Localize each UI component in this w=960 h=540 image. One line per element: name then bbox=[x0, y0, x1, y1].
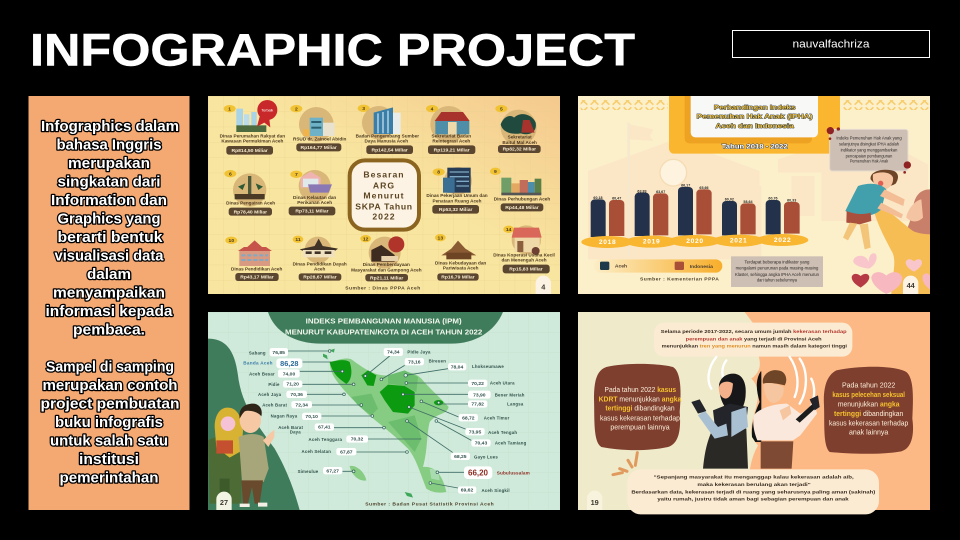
left callout: Pada tahun 2022 kasus bbox=[604, 387, 676, 394]
bottom quote: yaitu rumah, justru tidak aman bagi sebagian perempuan dan anak bbox=[657, 497, 849, 503]
left labels: Simeulue bbox=[298, 469, 319, 474]
right labels: 73,95 bbox=[469, 429, 481, 435]
item 6: Rp78,40 Miliar bbox=[234, 209, 267, 215]
info box: Pemenuhan Hak Anak bbox=[850, 159, 889, 164]
item 12: Dinas Pemberdayaan bbox=[363, 262, 410, 267]
page number: 27 bbox=[220, 498, 228, 507]
left labels: 67,27 bbox=[326, 469, 339, 475]
top decorative motif bbox=[581, 100, 929, 110]
panel: description text: project pembuatan bbox=[40, 396, 180, 412]
right labels: Pidie Jaya bbox=[407, 350, 431, 355]
left callout: kasus kekerasan terhadap bbox=[600, 415, 680, 422]
right labels: Langsa bbox=[507, 402, 524, 407]
right labels: 70,22 bbox=[471, 381, 484, 387]
bar chart: 60,76 bbox=[768, 197, 778, 201]
panel: description text: Sampel di samping bbox=[46, 358, 174, 376]
panel: description text: visualisasi data bbox=[54, 248, 164, 264]
decorative strokes bbox=[613, 453, 637, 475]
title banner bbox=[669, 96, 840, 154]
right labels: Lhokseumawe bbox=[472, 364, 504, 369]
item 4: Rp119,21 Miliar bbox=[434, 147, 470, 153]
right labels: Gayo Lues bbox=[474, 454, 498, 459]
item 8 bbox=[426, 167, 488, 214]
illustration: two people bbox=[691, 357, 820, 469]
item 11: 11 bbox=[295, 237, 301, 243]
page number bbox=[216, 492, 232, 510]
item 2: RSUD dr. Zainoel Abidin bbox=[293, 137, 347, 142]
item 2: Rp164,77 Miliar bbox=[301, 145, 337, 151]
title banner bbox=[268, 312, 503, 344]
item 1 bbox=[220, 100, 285, 155]
item 7: Dinas Kelautan dan bbox=[293, 195, 336, 200]
left labels: 86,28 bbox=[280, 359, 299, 368]
item 8: Rp53,32 Miliar bbox=[439, 207, 472, 213]
item 11 bbox=[293, 236, 347, 281]
panel: description text: Information dan bbox=[51, 192, 167, 209]
item 11: Aceh bbox=[314, 267, 326, 272]
item 13: 13 bbox=[438, 235, 443, 241]
bar chart: 60,33 bbox=[787, 199, 796, 203]
panel: ARG by SKPA bbox=[208, 96, 560, 294]
left labels: 72,34 bbox=[295, 402, 308, 408]
left labels: 76,85 bbox=[272, 350, 285, 356]
center title: ARG bbox=[373, 181, 395, 191]
right callout bbox=[824, 367, 913, 454]
center title: Besaran bbox=[363, 170, 405, 180]
legend: Aceh bbox=[615, 263, 627, 269]
author name box bbox=[732, 30, 930, 58]
bar chart: 60,47 bbox=[612, 197, 621, 201]
panel: description text: singkatan dari bbox=[58, 174, 160, 190]
item 8: Penataan Ruang Aceh bbox=[432, 198, 482, 203]
item 14: Dinas Koperasi Usaha Kecil bbox=[493, 252, 555, 257]
left callout: perempuan lainnya bbox=[610, 424, 670, 431]
item 9: Rp44,48 Miliar bbox=[505, 205, 539, 211]
right labels: 70,43 bbox=[475, 441, 487, 447]
item 5: Sekretariat bbox=[508, 135, 532, 140]
right labels: Aceh Utara bbox=[490, 381, 515, 386]
title banner: Perbandingan Indeks bbox=[714, 105, 796, 112]
left labels: Aceh Barat bbox=[262, 403, 287, 408]
panel: description text: Graphics yang bbox=[58, 210, 160, 228]
item 1: Kawasan Permukiman Aceh bbox=[221, 138, 283, 143]
item 6: Dinas Pengairan Aceh bbox=[226, 201, 275, 206]
left labels: 71,20 bbox=[286, 382, 299, 388]
info box: pencapaian pembangunan bbox=[846, 153, 893, 158]
left labels: Aceh Barat bbox=[278, 425, 303, 430]
item 13: Pariwisata Aceh bbox=[443, 266, 479, 271]
panel: description text: bahasa Inggris bbox=[56, 136, 162, 154]
left callout bbox=[594, 364, 681, 450]
left labels: Daya bbox=[290, 430, 301, 435]
item 1: 1 bbox=[228, 106, 231, 112]
legend: Indonesia bbox=[690, 264, 713, 270]
title: INFOGRAPHIC PROJECT bbox=[30, 24, 635, 76]
item 7: 7 bbox=[295, 172, 298, 178]
left labels: 70,10 bbox=[305, 414, 318, 420]
item 4: Sekretariat Badan bbox=[432, 134, 471, 139]
panel: description text: buku infografis bbox=[55, 414, 163, 431]
item 7: Perikanan Aceh bbox=[297, 200, 332, 205]
item 8: 8 bbox=[437, 170, 440, 176]
item 5 bbox=[495, 105, 541, 153]
item 6 bbox=[224, 170, 275, 216]
left labels: Aceh Jaya bbox=[258, 392, 282, 397]
source: Sumber : Dinas PPPA Aceh bbox=[345, 286, 421, 292]
right labels: 77,82 bbox=[471, 402, 484, 408]
item 13: Dinas Kebudayaan dan bbox=[435, 260, 486, 265]
item 14: dan Menengah Aceh bbox=[501, 258, 547, 263]
item 13: Rp16,79 Miliar bbox=[441, 275, 475, 281]
page number bbox=[903, 276, 918, 294]
bar chart: 2020 bbox=[686, 238, 704, 245]
item 12: 12 bbox=[363, 236, 369, 242]
item 3: 3 bbox=[362, 106, 365, 112]
panel: description text: merupakan contoh bbox=[42, 377, 178, 394]
item 3 bbox=[356, 105, 419, 154]
item 5: Baitul Mal Aceh bbox=[502, 140, 537, 145]
item 6: 6 bbox=[229, 171, 232, 177]
item 5: 5 bbox=[500, 106, 503, 112]
item 12: Rp21,11 Miliar bbox=[370, 275, 403, 281]
item 9: 9 bbox=[494, 169, 497, 175]
info box: Indeks Pemenuhan Hak Anak yang bbox=[836, 136, 902, 141]
title banner: Aceh dan Indonesia bbox=[715, 123, 794, 130]
note box: dari tahun sebelumnya bbox=[757, 278, 798, 283]
map of Aceh bbox=[323, 349, 449, 498]
panel: description text: berarti bentuk bbox=[58, 229, 163, 246]
left labels: Aceh Besar bbox=[249, 371, 275, 376]
item 4: 4 bbox=[431, 106, 434, 112]
note box: Terdapat beberapa indikator yang bbox=[744, 260, 810, 265]
page number: 44 bbox=[907, 281, 916, 290]
bottom quote: Berdasarkan data, kekerasan terjadi di ruang yang seharusnya paling aman (sakinah) bbox=[631, 489, 876, 495]
map dots bbox=[328, 350, 440, 484]
item 3: Daya Manusia Aceh bbox=[365, 139, 408, 144]
left callout: tertinggi dibandingkan bbox=[605, 406, 675, 413]
center title bbox=[350, 160, 419, 230]
right labels: Bener Meriah bbox=[495, 393, 525, 398]
illustration: two students bbox=[208, 404, 274, 509]
info box bbox=[827, 127, 911, 174]
note box: mengalami penurunan pada masing-masing bbox=[736, 266, 819, 271]
left labels: 70,36 bbox=[290, 392, 303, 398]
panel: description text: pembaca. bbox=[73, 322, 145, 338]
author name box: nauvalfachriza bbox=[792, 38, 870, 50]
left labels: 67,87 bbox=[340, 449, 353, 455]
bar chart: 65,66 bbox=[699, 186, 709, 190]
left labels: Nagan Raya bbox=[271, 414, 298, 419]
right labels: 73,16 bbox=[408, 359, 421, 365]
right labels: Bireuen bbox=[429, 359, 446, 364]
left labels: 67,41 bbox=[318, 425, 331, 431]
left labels: Banda Aceh bbox=[243, 360, 273, 365]
bar chart bbox=[581, 184, 808, 248]
title banner: Tahun 2018 - 2022 bbox=[722, 143, 788, 150]
source: Sumber : Badan Pusat Statistik Provinsi Aceh bbox=[365, 501, 494, 507]
bar chart: 60,18 bbox=[593, 196, 603, 200]
right labels: Aceh Singkil bbox=[481, 488, 510, 493]
info box: selanjutnya disingkat IPHA adalah bbox=[839, 142, 900, 147]
item 12: Masyarakat dan Gampong Aceh bbox=[351, 267, 422, 272]
right callout: anak lainnya bbox=[849, 430, 888, 437]
bottom quote: "Sepanjang masyarakat itu menganggap kalau kekerasan adalah aib, bbox=[654, 474, 854, 480]
title banner: INDEKS PEMBANGUNAN MANUSIA (IPM) bbox=[306, 317, 462, 326]
item 10 bbox=[225, 237, 282, 281]
right labels: 69,62 bbox=[461, 488, 473, 494]
left labels: Sabang bbox=[249, 350, 266, 355]
bar chart: 63,67 bbox=[656, 190, 665, 194]
item 9: Dinas Perhubungan Aceh bbox=[494, 197, 550, 202]
item 2 bbox=[290, 105, 347, 151]
item 2: 2 bbox=[295, 106, 298, 112]
item 8: Dinas Pekerjaan Umum dan bbox=[426, 193, 488, 198]
left labels: Aceh Selatan bbox=[302, 449, 331, 454]
top statement: menunjukkan tren yang menurun namun masih dalam kategori tinggi bbox=[662, 344, 848, 350]
top statement: Selama periode 2017-2022, secara umum jumlah kekerasan terhadap bbox=[661, 329, 847, 335]
bar chart: 2021 bbox=[730, 238, 747, 245]
right callout: kasus pelecehan seksual bbox=[832, 392, 905, 399]
faded school background bbox=[588, 123, 928, 259]
bar chart: 2022 bbox=[774, 237, 791, 244]
panel: description text: Infographics dalam bbox=[41, 118, 179, 135]
right labels: Aceh Tamiang bbox=[495, 441, 527, 446]
left labels: Aceh Tenggara bbox=[309, 437, 342, 442]
source: Sumber : Kementerian PPPA bbox=[640, 277, 719, 283]
page number bbox=[536, 276, 551, 294]
item 4 bbox=[426, 105, 475, 154]
leader lines bbox=[288, 351, 471, 488]
item 3: Badan Pengembang Sumber bbox=[356, 133, 419, 138]
item 13 bbox=[435, 234, 486, 281]
item 10: Dinas Pendidikan Aceh bbox=[231, 266, 282, 271]
right labels: 68,25 bbox=[454, 454, 467, 460]
item 12 bbox=[351, 235, 422, 281]
left labels: 74,00 bbox=[283, 371, 295, 377]
right labels: Aceh Tengah bbox=[488, 430, 517, 435]
title banner: MENURUT KABUPATEN/KOTA DI ACEH TAHUN 2022 bbox=[285, 327, 482, 336]
bar chart: 2019 bbox=[643, 239, 660, 246]
right labels: 66,20 bbox=[468, 469, 489, 478]
item 14: 14 bbox=[506, 227, 512, 233]
right labels: 78,04 bbox=[451, 364, 463, 370]
center title: 2022 bbox=[372, 211, 396, 221]
top statement: perempuan dan anak yang terjadi di Provinsi Aceh bbox=[686, 336, 822, 342]
right labels: 68,72 bbox=[462, 415, 475, 421]
bar chart: 63,83 bbox=[637, 189, 647, 193]
note box: Klaster, sehingga angka IPHA Aceh menurun bbox=[735, 272, 820, 277]
page number: 4 bbox=[541, 283, 546, 292]
item 14: Rp15,83 Miliar bbox=[509, 267, 543, 273]
legend bbox=[594, 259, 722, 273]
panel: description text: menyampaikan bbox=[53, 284, 165, 302]
right callout: tertinggi dibandingkan bbox=[834, 411, 903, 418]
right callout: menunjukkan angka bbox=[838, 402, 900, 409]
bottom quote: maka kekerasan berulang akan terjadi" bbox=[697, 482, 811, 488]
item 7: Rp73,11 Miliar bbox=[295, 209, 329, 215]
item 1: Terbaik bbox=[261, 108, 273, 112]
item 11: Rp28,67 Miliar bbox=[303, 275, 337, 281]
right callout: kasus kekerasan terhadap bbox=[829, 421, 908, 428]
info box: indikator yang menggambarkan bbox=[841, 147, 898, 152]
page number: 19 bbox=[591, 498, 599, 507]
item 1: Dinas Perumahan Rakyat dan bbox=[220, 133, 285, 138]
panel: IPM map bbox=[208, 312, 560, 510]
right labels: 73,90 bbox=[473, 392, 486, 398]
item 4: Reintegrasi Aceh bbox=[432, 139, 470, 144]
item 3: Rp142,54 Miliar bbox=[372, 147, 408, 153]
decorative green shape bbox=[208, 339, 300, 510]
bottom quote bbox=[627, 469, 879, 514]
right labels: Aceh Timur bbox=[484, 416, 510, 421]
bar chart: 60,02 bbox=[725, 198, 734, 202]
page number bbox=[587, 491, 602, 510]
item 10: Rp43,17 Miliar bbox=[240, 275, 274, 281]
left callout: KDRT menunjukkan angka bbox=[599, 396, 681, 403]
right labels: Subulussalam bbox=[497, 471, 530, 476]
panel: description text: merupakan bbox=[68, 155, 150, 172]
item 11: Dinas Pendidikan Dayah bbox=[293, 261, 347, 266]
center title: SKPA Tahun bbox=[355, 201, 413, 211]
bar chart: 66,17 bbox=[681, 184, 690, 188]
right callout: Pada tahun 2022 bbox=[842, 383, 895, 390]
item 7 bbox=[289, 170, 336, 215]
right labels: 74,34 bbox=[387, 350, 400, 356]
top statement bbox=[654, 323, 852, 357]
panel: IPHA comparison bbox=[578, 96, 930, 294]
panel: description text: dalam bbox=[87, 266, 131, 283]
panel: description text bbox=[28, 96, 190, 510]
item 14 bbox=[493, 225, 555, 273]
panel: description text: informasi kepada bbox=[46, 303, 173, 320]
panel: description text: untuk salah satu bbox=[50, 432, 168, 450]
center title: Menurut bbox=[363, 191, 405, 201]
panel: description text: institusi bbox=[79, 451, 139, 468]
illustration: mother and child bbox=[843, 170, 930, 294]
bar chart: 2018 bbox=[599, 239, 616, 246]
item 1: Rp814,50 Miliar bbox=[232, 148, 268, 154]
item 5: Rp82,32 Miliar bbox=[503, 147, 536, 153]
item 9 bbox=[490, 168, 550, 211]
left labels: Pidie bbox=[268, 382, 280, 387]
panel: violence statistics bbox=[578, 312, 930, 514]
panel: description text: pemerintahan bbox=[60, 470, 158, 486]
bar chart: 58,64 bbox=[743, 200, 754, 204]
left labels: 70,32 bbox=[351, 437, 363, 443]
item 10: 10 bbox=[229, 238, 234, 244]
right labels bbox=[384, 348, 530, 494]
title banner: Pemenuhan Hak Anak (IPHA) bbox=[697, 114, 813, 121]
left labels bbox=[243, 348, 368, 475]
note box bbox=[731, 256, 823, 287]
